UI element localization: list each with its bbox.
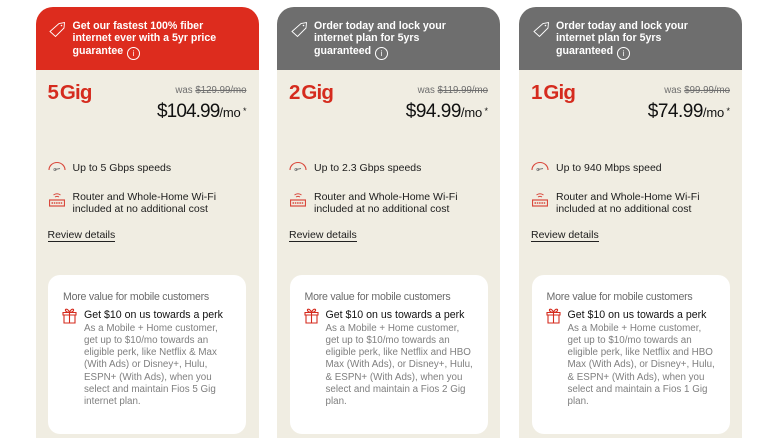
- banner text: Order today and lock your: [556, 20, 688, 32]
- header banner: 5 Gig: [36, 7, 258, 70]
- icon: speedometer: [48, 162, 66, 171]
- banner text: internet plan for 5yrs: [556, 32, 661, 44]
- banner text: i: [623, 48, 624, 58]
- icon: router: [49, 193, 65, 207]
- icon: speedometer: [289, 162, 307, 171]
- router text: Router and Whole-Home Wi-Fi: [314, 191, 458, 203]
- perk description: [84, 322, 218, 407]
- banner text: Get our fastest 100% fiber: [72, 20, 203, 32]
- banner text: Order today and lock your: [314, 20, 446, 32]
- perk description: eligible perk, like Netflix and HBO: [326, 347, 471, 358]
- router text: [72, 191, 216, 215]
- perk title: Get $10 on us towards a perk: [326, 309, 464, 321]
- banner text: internet plan for 5yrs: [314, 32, 419, 44]
- icon: price tag: [534, 22, 549, 37]
- perk description: eligible perk, like Netflix & Max: [84, 347, 217, 358]
- router text: [314, 191, 458, 215]
- perk description: As a Mobile + Home customer,: [84, 322, 218, 334]
- review details link: Review details: [48, 228, 115, 240]
- perk description: select and maintain a Fios 2 Gig: [326, 384, 465, 395]
- icon: price tag: [292, 22, 307, 37]
- perk description: eligible perk, like Netflix and HBO: [568, 347, 713, 358]
- perk description: [568, 322, 715, 407]
- banner text: [314, 20, 446, 60]
- previous price: was $99.99/mo: [664, 84, 730, 96]
- header banner: 1 Gig: [519, 7, 742, 70]
- current price: $104.99/mo *: [157, 101, 246, 122]
- perk description: plan.: [568, 396, 589, 407]
- perk description: select and maintain a Fios 1 Gig: [568, 384, 707, 395]
- speed text: Up to 2.3 Gbps speeds: [314, 162, 421, 174]
- perk description: get up to $10/mo towards an: [84, 335, 208, 346]
- perk description: ESPN+ (With Ads), when you: [84, 372, 212, 382]
- current price: $74.99/mo *: [648, 101, 730, 122]
- icon: gift: [62, 308, 77, 324]
- review details link: Review details: [289, 228, 357, 240]
- icon: price tag: [49, 22, 65, 37]
- perk description: Max (With Ads), or Disney+, Hulu,: [568, 359, 715, 370]
- previous price: was $129.99/mo: [175, 84, 246, 96]
- perk description: & ESPN+ (With Ads), when you: [326, 372, 462, 382]
- panel: mobile customer perk: [48, 275, 246, 434]
- perk description: As a Mobile + Home customer,: [568, 322, 701, 334]
- panel: mobile customer perk: [290, 275, 488, 434]
- router text: included at no additional cost: [314, 203, 449, 215]
- previous price: was $119.99/mo: [418, 84, 488, 96]
- icon: speedometer: [531, 162, 549, 171]
- speed text: Up to 5 Gbps speeds: [72, 162, 171, 174]
- perk description: plan.: [326, 396, 347, 407]
- perk description: As a Mobile + Home customer,: [326, 322, 459, 334]
- perk description: Max (With Ads), or Disney+, Hulu,: [326, 359, 473, 370]
- icon: router: [290, 193, 306, 207]
- panel: 2 Gig plan: [277, 7, 500, 438]
- router text: included at no additional cost: [72, 203, 208, 215]
- banner text: i: [133, 48, 134, 58]
- current price: $94.99/mo *: [406, 101, 488, 122]
- icon: gift: [304, 308, 319, 324]
- panel: 5 Gig plan: [36, 7, 258, 438]
- perk description: (With Ads) or Disney+, Hulu,: [84, 359, 207, 370]
- perk heading: More value for mobile customers: [546, 290, 692, 302]
- banner text: [72, 20, 216, 60]
- banner text: i: [381, 48, 382, 58]
- perk description: get up to $10/mo towards an: [568, 335, 692, 346]
- review details link: Review details: [531, 228, 599, 240]
- banner text: [556, 20, 688, 60]
- plan name: 5 Gig: [48, 80, 92, 104]
- perk description: [326, 322, 473, 407]
- panel: mobile customer perk: [532, 275, 730, 434]
- router text: included at no additional cost: [556, 203, 691, 215]
- banner text: guaranteed: [314, 44, 371, 56]
- icon: gift: [546, 308, 561, 324]
- plan name: 2 Gig: [289, 80, 333, 104]
- router text: Router and Whole-Home Wi-Fi: [72, 191, 216, 203]
- perk title: Get $10 on us towards a perk: [568, 309, 706, 321]
- perk heading: More value for mobile customers: [304, 290, 450, 302]
- icon: router: [532, 193, 548, 207]
- banner text: internet ever with a 5yr price: [72, 32, 216, 44]
- header banner: 2 Gig: [277, 7, 500, 70]
- speed text: Up to 940 Mbps speed: [556, 162, 662, 174]
- perk title: Get $10 on us towards a perk: [84, 309, 223, 321]
- banner text: guarantee: [72, 44, 123, 56]
- perk heading: More value for mobile customers: [63, 290, 209, 302]
- banner text: guaranteed: [556, 44, 613, 56]
- perk description: internet plan.: [84, 396, 141, 407]
- perk description: select and maintain Fios 5 Gig: [84, 384, 216, 395]
- router text: Router and Whole-Home Wi-Fi: [556, 191, 700, 203]
- plan name: 1 Gig: [531, 80, 575, 104]
- panel: 1 Gig plan: [519, 7, 742, 438]
- perk description: & ESPN+ (With Ads), when you: [568, 372, 704, 382]
- router text: [556, 191, 700, 215]
- perk description: get up to $10/mo towards an: [326, 335, 450, 346]
